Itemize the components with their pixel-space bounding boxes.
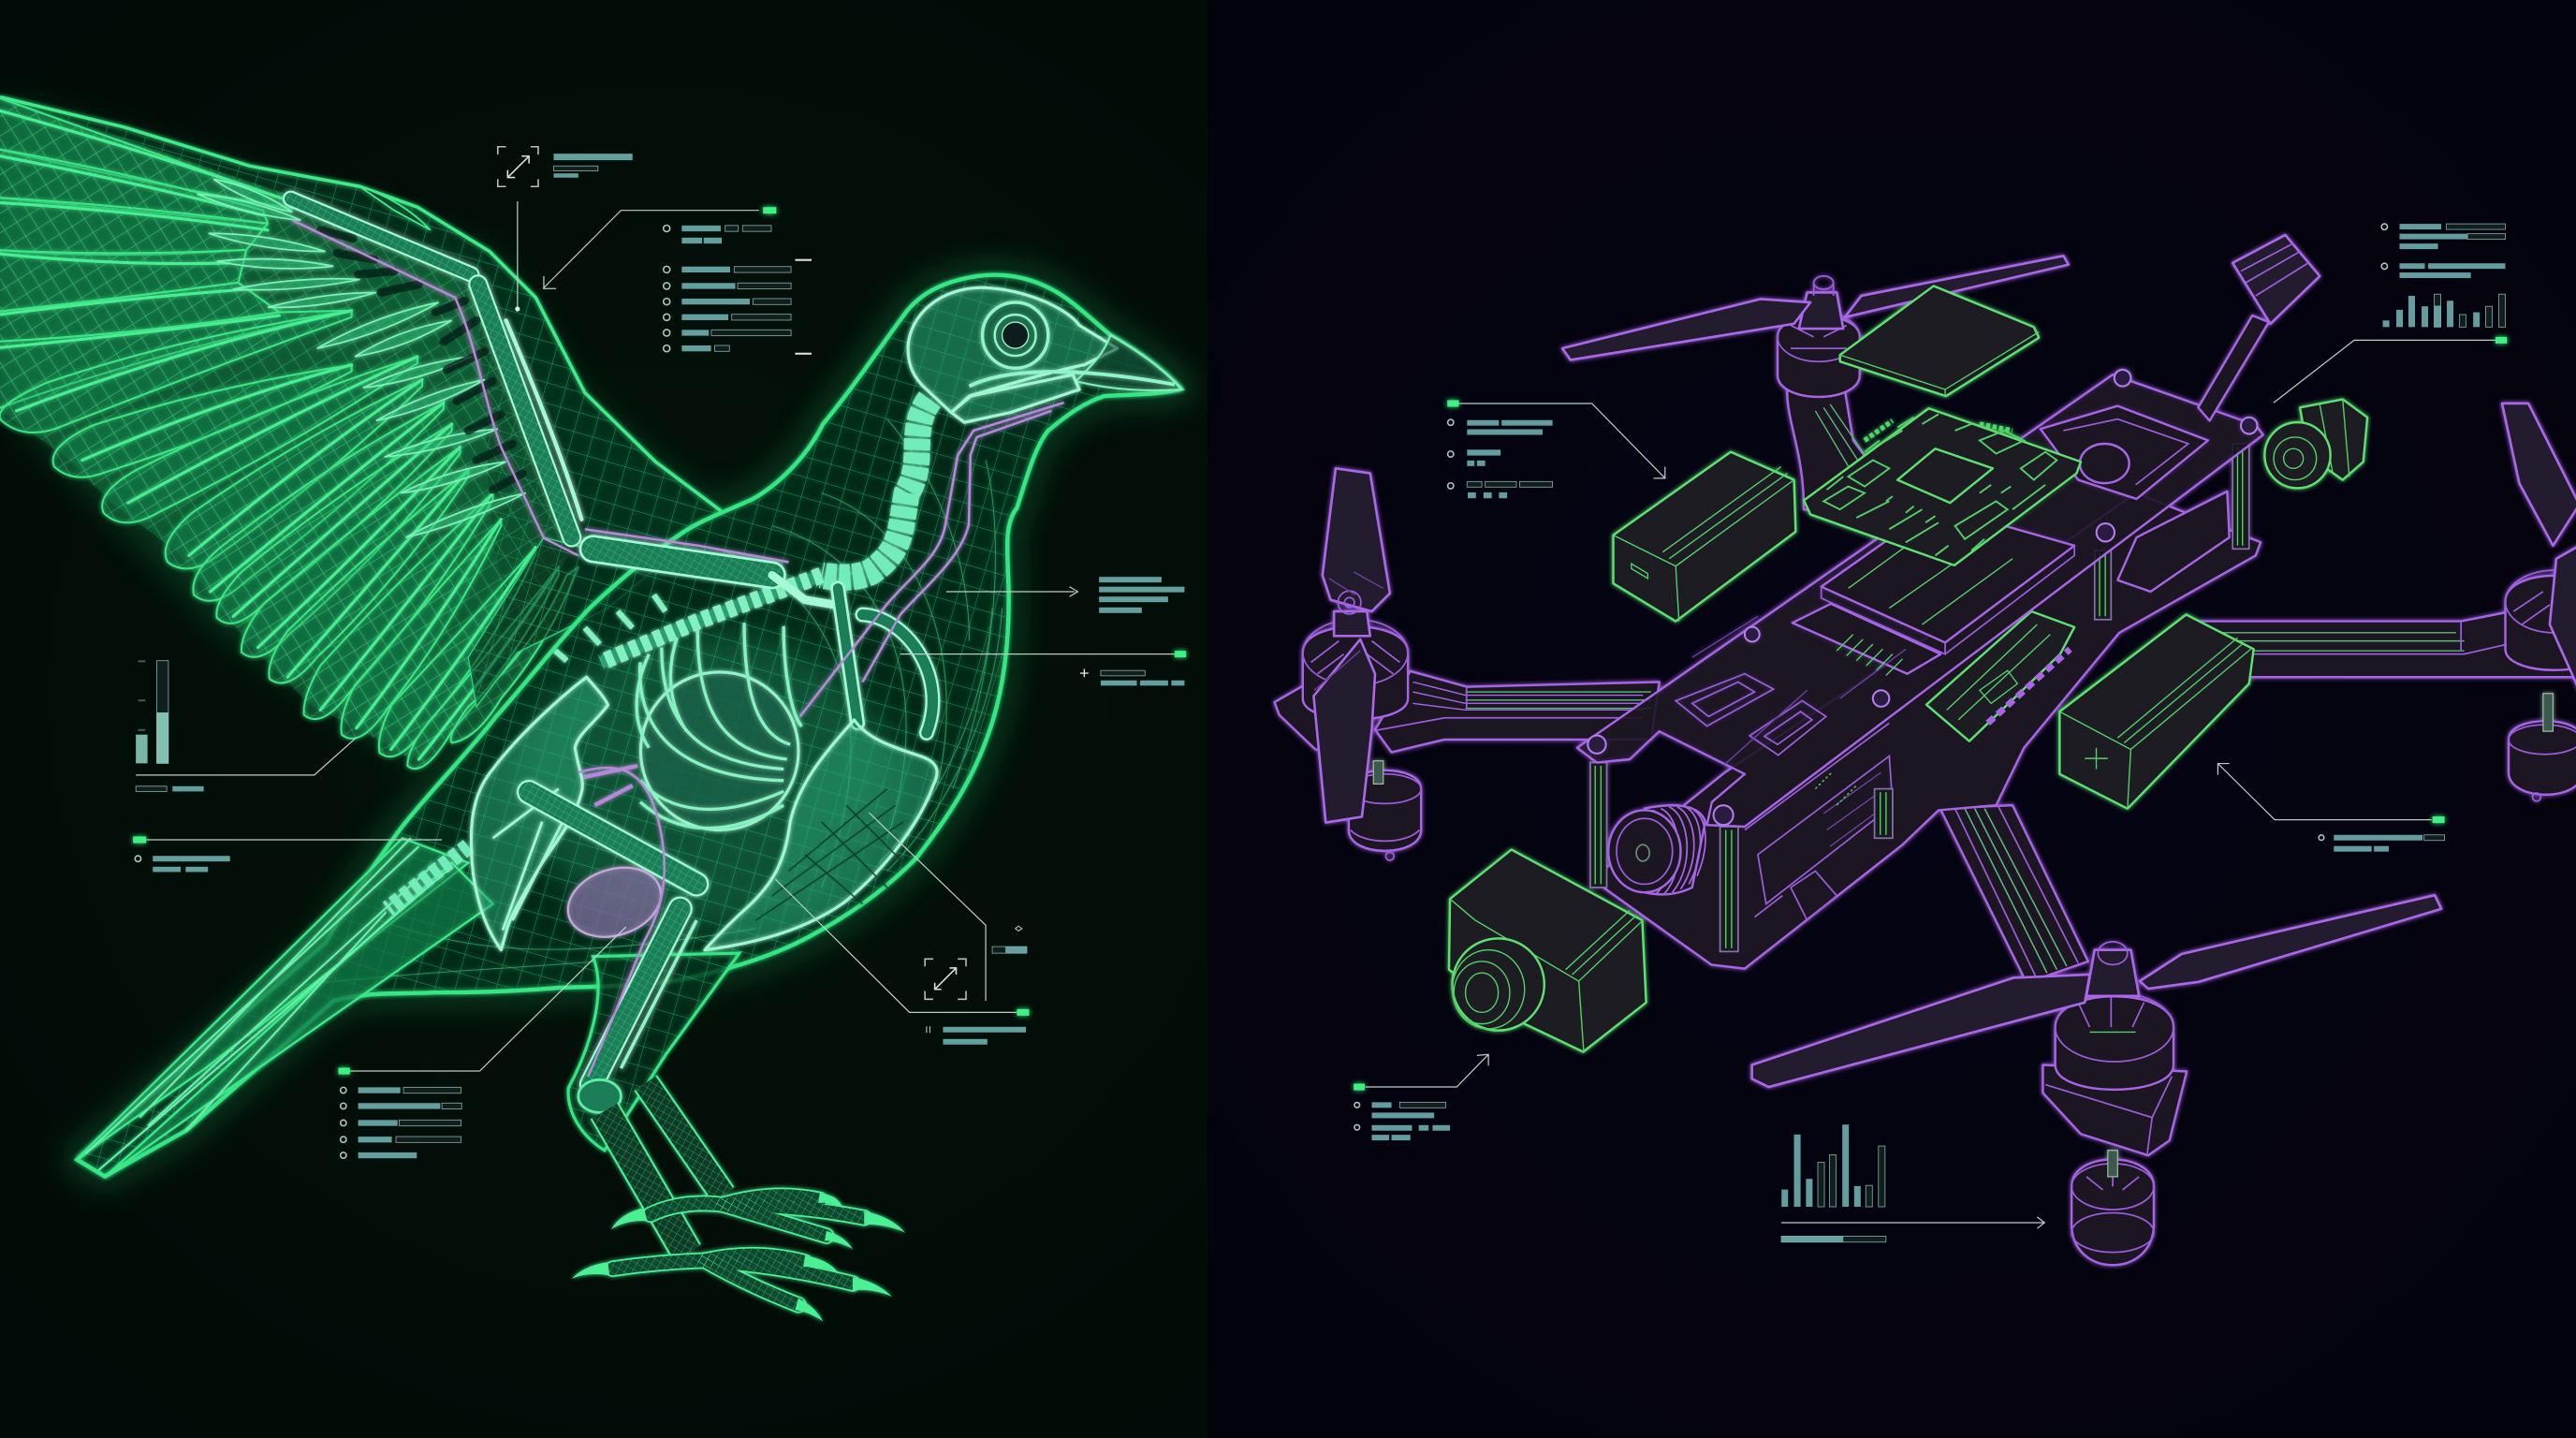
note bars <box>1099 577 1184 613</box>
callout: leg data list <box>339 927 626 1158</box>
arrow to motor <box>1781 1217 2044 1228</box>
covert feathers <box>198 179 526 537</box>
gauge label bars <box>136 786 204 791</box>
secondary feathers <box>53 357 578 769</box>
callout: tail note <box>133 837 442 872</box>
pelvis struts <box>493 789 567 931</box>
callout: wing scale icon and note <box>498 147 633 312</box>
green tag <box>2433 816 2445 823</box>
antenna <box>2198 235 2320 420</box>
rear-left arm and top motor <box>1778 276 1889 509</box>
note icon <box>2319 835 2324 841</box>
mid board stack <box>1822 506 2074 642</box>
arrow to neck <box>946 587 1077 596</box>
list icons <box>2381 224 2388 270</box>
neck vertebrae <box>822 400 929 578</box>
left lower motor <box>1349 761 1421 860</box>
torso haze <box>518 633 896 929</box>
small detail bars <box>992 926 1027 953</box>
spine spines <box>555 594 666 661</box>
leader arrow <box>543 211 759 288</box>
leader line <box>146 839 442 841</box>
green part: front camera <box>1449 850 1647 1051</box>
wing fan base <box>0 98 575 759</box>
list bars <box>1372 1102 1450 1140</box>
eye socket <box>983 302 1048 368</box>
green tag <box>1175 651 1186 657</box>
hand bone <box>291 198 472 274</box>
bird skeleton and organs <box>388 287 1181 1321</box>
note icon <box>135 856 141 861</box>
spine <box>601 575 822 662</box>
wing membrane <box>0 97 721 653</box>
note bars <box>2334 835 2445 852</box>
background: right drone panel <box>1208 0 2576 1438</box>
leader line <box>2274 340 2496 403</box>
lower foot <box>572 1255 892 1321</box>
list icons <box>1354 1103 1360 1130</box>
board components <box>1823 414 2056 555</box>
note bars <box>553 154 633 178</box>
lower frame body <box>1592 493 2261 969</box>
furcula hook <box>862 615 932 733</box>
leader line <box>900 653 1175 655</box>
green part: right battery <box>2059 615 2254 809</box>
green tag <box>133 837 146 844</box>
rear opening <box>2041 406 2208 499</box>
right arm <box>2182 605 2576 677</box>
green part: left battery <box>1614 452 1795 622</box>
list bars <box>2400 224 2506 278</box>
green tag <box>339 1068 350 1075</box>
plate screws <box>1588 370 2258 825</box>
plus icon <box>1080 668 1089 677</box>
bird tail feathers <box>77 838 493 1177</box>
list icons <box>341 1087 346 1158</box>
callout: left battery data panel <box>1447 400 1665 498</box>
bottom motor and mount <box>2042 942 2187 1155</box>
side board details <box>1745 723 1893 920</box>
leader lines <box>775 813 1017 1012</box>
green tag <box>763 207 776 213</box>
bottom propeller <box>1752 895 2441 1087</box>
bird wing <box>0 95 721 769</box>
callout: motor bar chart <box>1781 1124 2044 1242</box>
leader line <box>350 927 626 1071</box>
top frame plate <box>1577 370 2263 827</box>
green tag <box>1354 1084 1365 1091</box>
purple vessels <box>800 403 1064 716</box>
green under board <box>1926 611 2074 741</box>
gauge bars <box>136 661 168 763</box>
right motor and propeller <box>2502 404 2576 690</box>
note bars <box>153 856 230 872</box>
icon: expand brackets <box>925 959 966 999</box>
sternum <box>705 720 937 950</box>
leg shell <box>568 953 739 1151</box>
list bars <box>681 226 791 351</box>
front tarsus <box>605 1111 687 1253</box>
note bars <box>1101 670 1184 685</box>
range ticks <box>795 259 812 355</box>
ribs <box>637 623 801 829</box>
bird outer glow <box>0 98 1181 1177</box>
callout: furcula note <box>900 651 1186 685</box>
stomach mass <box>640 672 798 829</box>
primary feathers <box>0 95 352 433</box>
illustration: exploded FPV drone wireframe <box>1275 235 2576 1265</box>
callout: front camera data panel <box>1354 1054 1488 1140</box>
callout: wing gauge <box>136 660 357 791</box>
callout: sternum note <box>775 813 1029 1045</box>
forearm bones <box>478 285 581 537</box>
callout: neck note <box>946 577 1184 613</box>
rear tarsus <box>646 1083 723 1195</box>
green part: flat battery <box>1840 286 2039 396</box>
humerus <box>593 549 835 605</box>
dark feather slots <box>320 230 522 490</box>
bird body shell <box>77 275 1181 1177</box>
bar chart <box>2383 294 2506 327</box>
standoffs <box>1590 444 2249 951</box>
wing vessel <box>292 220 578 555</box>
callout: wing data list <box>543 207 812 355</box>
leader line <box>136 738 357 775</box>
leader line down to wing <box>515 201 520 312</box>
left propeller <box>1313 468 1390 823</box>
background: left bird panel <box>0 0 1208 1438</box>
callout: antenna data panel <box>2274 224 2507 403</box>
sternum mesh <box>755 789 903 920</box>
list icons <box>664 225 670 352</box>
tibia <box>592 909 696 1085</box>
plate chips <box>1676 674 1826 756</box>
green tag <box>1017 1009 1029 1016</box>
gauge ticks <box>138 660 145 731</box>
femur <box>529 792 696 884</box>
leader arrow <box>1459 404 1665 478</box>
front arm <box>1940 805 2088 983</box>
progress bar <box>1781 1236 1886 1242</box>
left motor <box>1303 611 1408 719</box>
list icons <box>1448 419 1454 489</box>
wing root mesh <box>468 537 657 707</box>
leader arrow <box>2217 764 2432 820</box>
illustration: wireframe bird anatomy <box>0 95 1181 1321</box>
list bars <box>359 1087 461 1158</box>
green tag <box>2496 337 2507 344</box>
kidney oval <box>559 857 670 948</box>
green part: flight controller board <box>1804 408 2081 565</box>
upper foot <box>611 1193 905 1249</box>
green part: small camera <box>2264 400 2367 488</box>
bar chart <box>1781 1124 1885 1207</box>
tail vertebrae <box>388 846 468 909</box>
leader arrow <box>1365 1054 1488 1087</box>
loose motor <box>2071 1151 2154 1265</box>
keel post <box>838 588 857 723</box>
rear box <box>2117 492 2230 592</box>
feather shafts <box>0 109 559 759</box>
left arm <box>1275 671 1660 756</box>
skull <box>908 287 1181 422</box>
knee <box>578 1079 621 1112</box>
frame camera lens <box>1608 805 1705 894</box>
pelvis <box>471 677 607 950</box>
right lower motor <box>2509 694 2576 801</box>
note bars <box>927 1026 1026 1045</box>
callout: right battery data panel <box>2217 764 2445 852</box>
top propeller <box>1562 256 2069 360</box>
green tag <box>1447 400 1459 406</box>
list bars <box>1467 420 1553 498</box>
icon: expand brackets <box>498 147 538 186</box>
